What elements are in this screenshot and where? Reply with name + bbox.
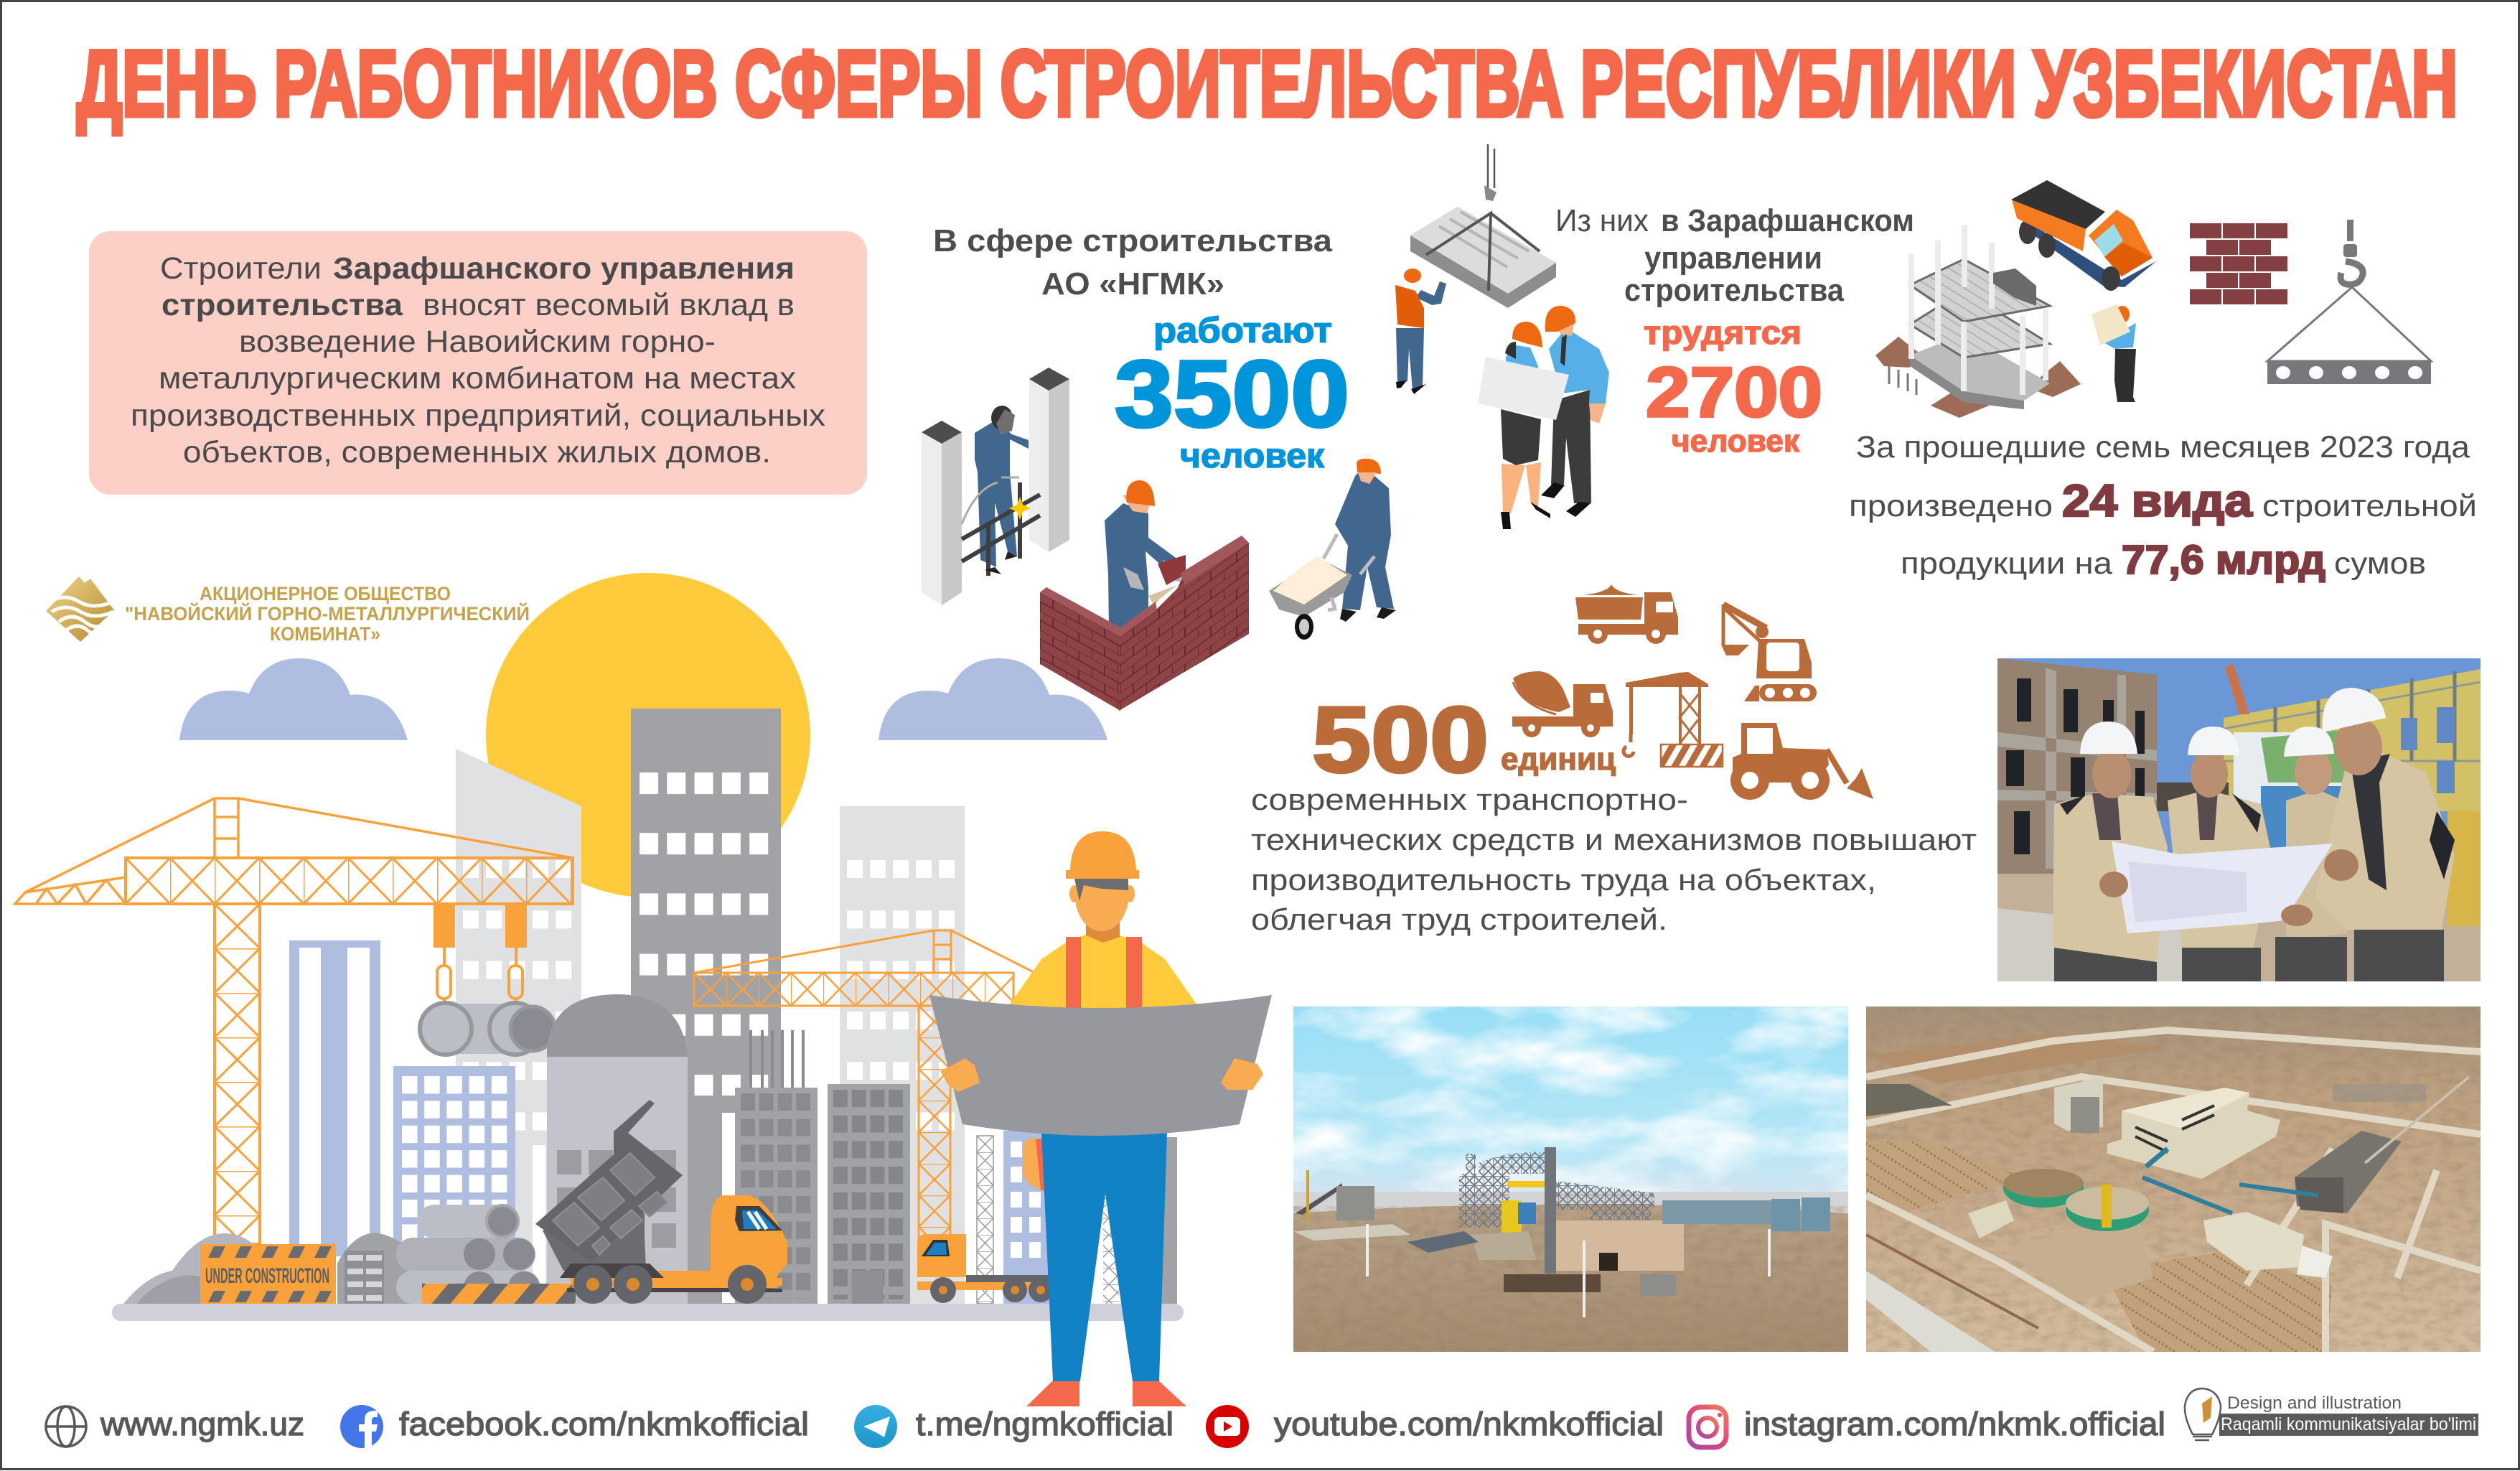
steel frame bbox=[1459, 1174, 1509, 1228]
panel: intro text: Строители bbox=[160, 251, 322, 286]
company name: АКЦИОНЕРНОЕ ОБЩЕСТВО bbox=[200, 583, 451, 604]
hazard strip bbox=[422, 1284, 576, 1304]
panel: intro text bbox=[89, 231, 867, 495]
stat: 24 kinds, 77.6 bn: сумов bbox=[2334, 546, 2426, 581]
illustration: welder at pillars bbox=[922, 368, 1069, 605]
stat: 3500 employees: человек bbox=[1180, 437, 1325, 475]
logo: NGMK company bbox=[46, 576, 530, 645]
stat: 2700 in Zarafshan: Из них bbox=[1555, 203, 1649, 238]
small truck: yellow bbox=[917, 1234, 1055, 1303]
link: website bbox=[46, 1406, 304, 1447]
head bbox=[1066, 831, 1139, 943]
stat: 2700 in Zarafshan: человек bbox=[1672, 424, 1800, 459]
long process line bbox=[2295, 1131, 2402, 1213]
icon: concrete mixer bbox=[1512, 671, 1613, 737]
link: website: www.ngmk.uz bbox=[100, 1406, 304, 1442]
company name: "НАВОЙСКИЙ ГОРНО-МЕТАЛЛУРГИЧЕСКИЙ bbox=[125, 602, 530, 625]
lattice tower bbox=[977, 1136, 993, 1304]
panel: intro text: вносят весомый вклад в bbox=[423, 288, 795, 322]
stacked pipes bbox=[396, 1205, 540, 1304]
illustration: foreman reading blueprint bbox=[929, 831, 1272, 1406]
stat: 500 units: 500 bbox=[1312, 687, 1489, 792]
illustration: engineer with blueprint bbox=[2092, 304, 2136, 402]
panel: intro text: объектов, современных жилых домов. bbox=[183, 435, 771, 470]
stat: 500 units: единиц bbox=[1501, 742, 1616, 777]
icon: tower crane bbox=[1624, 672, 1723, 767]
building: mid grey B bbox=[828, 1084, 910, 1304]
icon: loader bbox=[1730, 723, 1873, 800]
stat: 3500 employees: АО «НГМК» bbox=[1041, 266, 1224, 302]
stat: 24 kinds, 77.6 bn: строительной bbox=[2262, 489, 2477, 523]
link: telegram bbox=[854, 1405, 1174, 1448]
photo: aerial industrial site bbox=[1866, 1007, 2481, 1352]
stat: 2700 in Zarafshan: управлении bbox=[1644, 241, 1822, 276]
panel: intro text: производственных предприятий, социальных bbox=[131, 398, 826, 433]
photo: engineers with plan bbox=[1997, 658, 2481, 981]
building: grey tower bbox=[631, 709, 781, 1304]
plan sheet bbox=[1478, 357, 1569, 420]
ground bbox=[112, 1304, 1184, 1321]
building: grey right of worker bbox=[1156, 1137, 1177, 1304]
credit: design and illustration: Raqamli kommunikatsiyalar bo'limi bbox=[2221, 1414, 2476, 1434]
dump truck: yellow bbox=[535, 1100, 787, 1304]
panel: intro text: возведение Навоийским горно- bbox=[239, 324, 716, 359]
stat: 24 kinds, 77.6 bn: продукции на bbox=[1901, 546, 2112, 581]
stat: 3500 employees: работают bbox=[1153, 310, 1332, 350]
brick wall bbox=[1040, 536, 1249, 711]
photo: construction site panorama bbox=[1293, 1007, 1848, 1352]
icon: excavator bbox=[1721, 604, 1817, 701]
stat: 500 units bbox=[1251, 687, 1977, 936]
men bbox=[2053, 793, 2168, 962]
stat: 2700 in Zarafshan: в Зарафшанском bbox=[1661, 203, 1914, 238]
bricklayer figure bbox=[1105, 480, 1186, 632]
gravel piles bbox=[123, 1233, 413, 1304]
illustration: concrete frame building bbox=[1875, 225, 2081, 418]
link: youtube bbox=[1206, 1405, 1664, 1448]
illustration: bricklayer and wall bbox=[1040, 480, 1249, 711]
link: instagram: instagram.com/nkmk.official bbox=[1744, 1406, 2165, 1442]
building: mid grey A bbox=[735, 1088, 818, 1304]
illustration: orange dump truck bbox=[2011, 180, 2156, 291]
blueprint bbox=[929, 995, 1272, 1136]
under construction sign: UNDER CONSTRUCTION bbox=[205, 1264, 329, 1288]
building: blue behind worker bbox=[1003, 1131, 1054, 1304]
link: youtube: youtube.com/nkmkofficial bbox=[1274, 1406, 1664, 1442]
icon: dump truck bbox=[1575, 584, 1678, 644]
rocks bbox=[1875, 337, 2081, 418]
man bbox=[1541, 306, 1609, 517]
illustration: crane lifting slab bbox=[0, 0, 1609, 529]
silos bbox=[2054, 1077, 2103, 1131]
worker with orange vest bbox=[1395, 268, 1446, 394]
building: light grey slanted bbox=[456, 749, 581, 1304]
boots bbox=[1026, 1381, 1186, 1406]
hanging pipe bbox=[420, 1003, 555, 1055]
trousers bbox=[1041, 1131, 1167, 1381]
company name bbox=[125, 583, 530, 645]
woman bbox=[1501, 322, 1550, 529]
two engineers with plan bbox=[1478, 306, 1609, 529]
silo bbox=[547, 994, 688, 1304]
icon: light bulb with pen bbox=[2185, 1388, 2221, 1440]
stat: 24 kinds, 77.6 bn: За прошедшие семь месяцев 2023 года bbox=[1856, 430, 2470, 464]
stat: 3500 employees bbox=[933, 223, 1349, 475]
stacked bricks pallet bbox=[345, 1251, 384, 1304]
link: facebook: facebook.com/nkmkofficial bbox=[399, 1406, 809, 1442]
pillar right bbox=[1029, 368, 1069, 552]
stat: 2700 in Zarafshan: 2700 bbox=[1646, 352, 1822, 431]
panel: intro text: Зарафшанского управления bbox=[333, 251, 795, 286]
icon: brick wall bbox=[2190, 223, 2287, 304]
rebar bbox=[751, 1030, 803, 1088]
panel: intro text: металлургическим комбинатом на местах bbox=[159, 361, 797, 396]
footer: contact links bbox=[46, 1405, 2165, 1448]
stat: 500 units: облегчая труд строителей. bbox=[1251, 902, 1667, 936]
stat: 24 kinds, 77.6 bn: 77,6 млрд bbox=[2122, 537, 2325, 583]
torso bbox=[1009, 929, 1197, 1019]
company name: КОМБИНАТ» bbox=[270, 623, 380, 645]
panel: intro text: строительства bbox=[161, 288, 403, 322]
illustration: worker with wheelbarrow bbox=[1269, 459, 1396, 640]
cloud right bbox=[879, 658, 1107, 740]
lattice between legs bbox=[1103, 1194, 1119, 1304]
crane: second orange bbox=[694, 930, 1034, 1243]
tool belt bbox=[1023, 1138, 1046, 1190]
stat: 2700 in Zarafshan bbox=[1555, 203, 1914, 459]
sun bbox=[486, 573, 810, 897]
link: telegram: t.me/ngmkofficial bbox=[916, 1406, 1174, 1442]
stat: 2700 in Zarafshan: трудятся bbox=[1644, 314, 1802, 351]
welder figure bbox=[962, 406, 1040, 576]
stat: 3500 employees: 3500 bbox=[1115, 341, 1349, 447]
credit: design and illustration bbox=[2185, 1388, 2478, 1440]
crane: big orange bbox=[15, 798, 573, 1244]
hands bbox=[940, 1058, 1263, 1092]
stat: 3500 employees: В сфере строительства bbox=[933, 223, 1333, 258]
illustration: city construction scene bbox=[15, 658, 1184, 1321]
stat: 500 units: производительность труда на объектах, bbox=[1251, 863, 1876, 897]
stat: 500 units: технических средств и механизмов повышают bbox=[1251, 823, 1977, 856]
helmet bbox=[1066, 831, 1139, 879]
cloud left bbox=[179, 658, 408, 740]
link: facebook bbox=[340, 1405, 809, 1448]
icon: hook with slab bbox=[2267, 220, 2431, 384]
pillar left bbox=[922, 421, 962, 605]
stat: 24 kinds, 77.6 bn: 24 вида bbox=[2062, 476, 2253, 526]
building: blue grid bbox=[393, 1066, 515, 1304]
stat: 2700 in Zarafshan: строительства bbox=[1624, 273, 1844, 308]
building: blue tower bbox=[289, 940, 380, 1256]
stat: 500 units: современных транспортно- bbox=[1251, 783, 1688, 816]
under construction sign bbox=[200, 1244, 336, 1304]
icon: gold mountain diamond bbox=[46, 576, 114, 642]
stat: 24 kinds, 77.6 bn bbox=[1849, 430, 2477, 583]
building: light grey right bbox=[840, 806, 965, 1304]
icons: brown machinery bbox=[1512, 584, 1873, 800]
credit: design and illustration: Design and illustration bbox=[2227, 1393, 2402, 1413]
main building bbox=[2107, 1088, 2280, 1179]
fields bbox=[1866, 1141, 2024, 1213]
stat: 24 kinds, 77.6 bn: произведено bbox=[1849, 489, 2053, 523]
